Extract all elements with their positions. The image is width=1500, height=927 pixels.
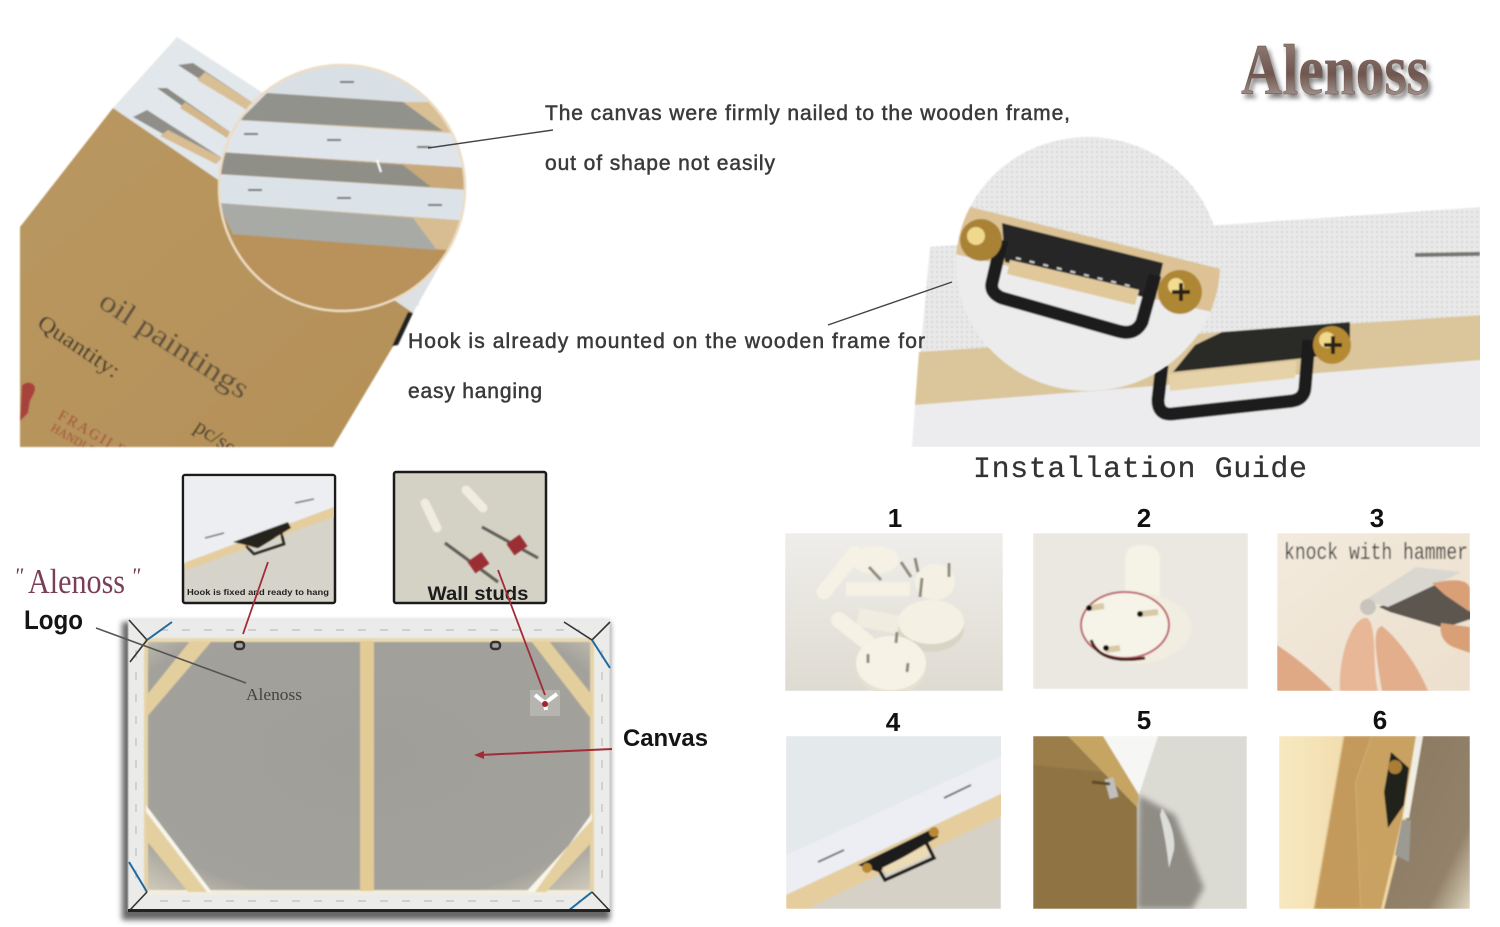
inset: hook is fixed [183, 475, 335, 603]
logo: Alenoss: Alenoss [1241, 30, 1429, 110]
photo: stacked canvases in cardboard box [20, 37, 440, 463]
overlaid stud detail [530, 690, 560, 716]
label: Canvas: Canvas [623, 725, 708, 752]
arrow: hook inset to frame [243, 562, 268, 634]
magnifier circle: hook close-up [950, 135, 1225, 395]
step 6 [1279, 705, 1470, 909]
canvas back diagram [122, 619, 610, 920]
wood frame rails [144, 638, 594, 894]
caption: nailed canvas: The canvas were firmly nailed to the wooden frame, [545, 102, 1070, 125]
step 5: 5 [1137, 705, 1151, 735]
step 2: 2 [1137, 503, 1151, 533]
step 5 [1033, 705, 1247, 909]
caption: hook mounted [408, 330, 925, 403]
box printing: FRAGILE [55, 408, 130, 460]
step 4 [786, 707, 1003, 909]
box printing [19, 296, 247, 448]
drop shadow [122, 622, 610, 920]
small hook [1158, 322, 1351, 414]
cardboard box [20, 108, 413, 447]
white stretched frame [128, 619, 610, 911]
step 3: 3 [1370, 503, 1384, 533]
grey canvas interior [147, 640, 592, 893]
heading: installation guide: Installation Guide [973, 453, 1307, 487]
label: Logo: Logo [24, 605, 83, 635]
box printing: Quantity: [33, 309, 125, 383]
inset: wall studs: Wall studs [428, 583, 529, 605]
inset: hook is fixed: Hook is fixed and ready to hang [187, 587, 329, 597]
step 3 [1277, 503, 1474, 691]
step 1: 1 [888, 503, 902, 533]
step 2 [1033, 503, 1248, 689]
leader line: logo [96, 628, 246, 683]
magnifier circle: canvas nailed to frame [218, 60, 470, 311]
caption: hook mounted: easy hanging [408, 380, 542, 403]
step 4: 4 [886, 707, 901, 737]
leader line to nailed canvas [428, 130, 553, 148]
label: quoted Alenoss brand: " [14, 563, 24, 588]
arrow: canvas label [474, 749, 612, 759]
leader line to hook [828, 282, 952, 325]
box printing: pc/set [190, 413, 247, 463]
label: quoted Alenoss brand: Alenoss [28, 562, 125, 601]
inset: wall studs [394, 472, 546, 605]
corner folds [129, 620, 610, 911]
step 1 [785, 503, 1003, 695]
label: quoted Alenoss brand: " [131, 563, 141, 588]
caption: nailed canvas: out of shape not easily [545, 152, 776, 175]
box printing: HANDLE [48, 420, 98, 457]
arrow: wall studs to canvas [498, 570, 545, 695]
printed logo on canvas: Alenoss [246, 685, 302, 704]
stacked white canvas frames [113, 37, 440, 313]
photo: hook mounted on frame [912, 207, 1483, 447]
box printing: oil paintings [93, 284, 255, 406]
caption: hook mounted: Hook is already mounted on the wooden frame for [408, 330, 925, 353]
hangers [235, 642, 500, 649]
step 6: 6 [1373, 705, 1387, 735]
caption: nailed canvas [545, 102, 1070, 175]
